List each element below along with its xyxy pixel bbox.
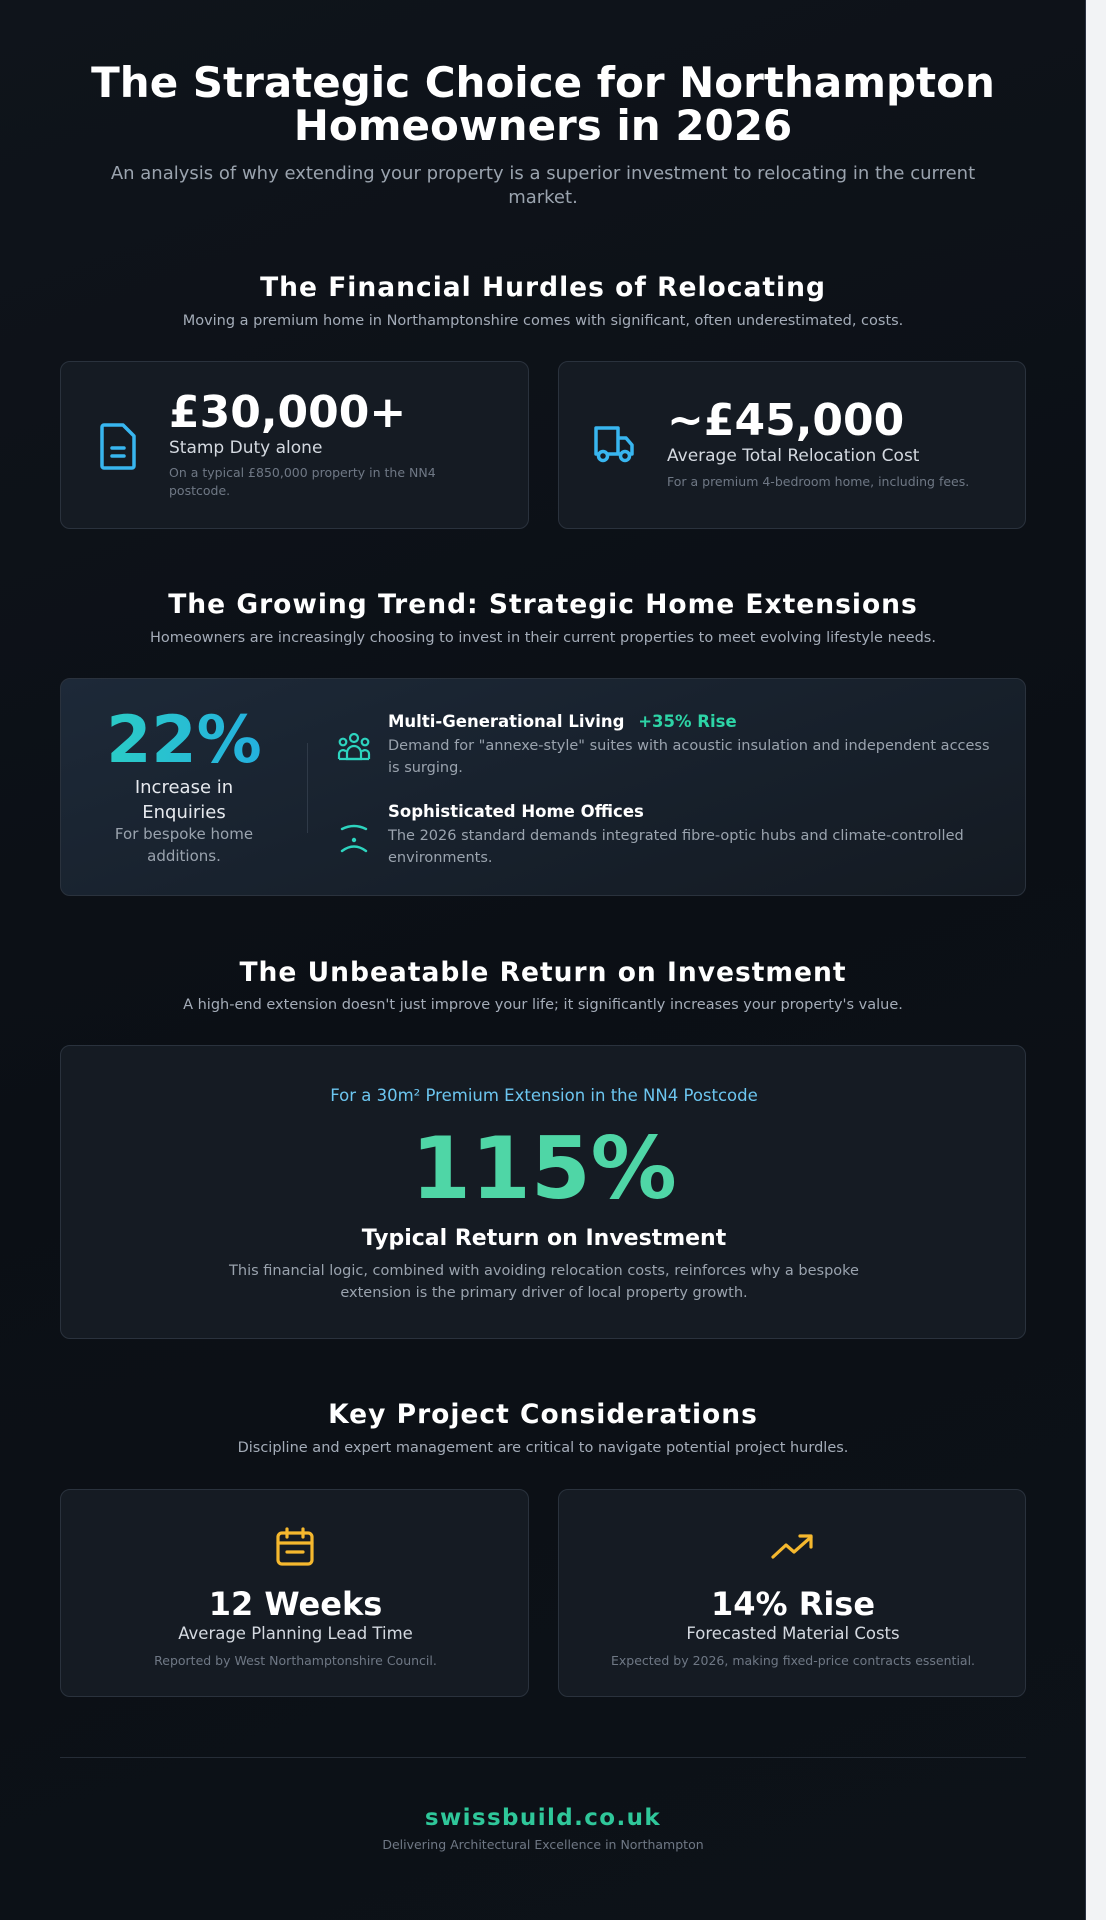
title [91,58,995,150]
label: relocation: Average Total Relocation Cost [667,446,919,466]
card: relocation cost [558,361,1026,529]
footer: tagline: Delivering Architectural Excellence in Northampton [382,1837,704,1852]
subheading: considerations: Discipline and expert management are critical to navigate potential project hurdles. [238,1440,848,1456]
label: materials: Forecasted Material Costs [686,1624,900,1643]
heading: roi: The Unbeatable Return on Investment [239,957,847,988]
stat: 14% rise: 14% Rise [711,1585,875,1623]
subtitle: An analysis of why extending your property is a superior investment to relocating in the current market. [111,163,975,208]
label: enquiries: Enquiries [142,802,226,823]
subheading: growing trend: Homeowners are increasingly choosing to invest in their current properties to meet evolving lifestyle needs. [150,630,936,646]
stat: 115%: 115% [411,1119,677,1219]
heading: financial hurdles: The Financial Hurdles of Relocating [260,272,826,303]
title: multi-generational: Multi-Generational Living +35% Rise [388,712,737,731]
note: materials: Expected by 2026, making fixed-price contracts essential. [611,1653,975,1668]
note: bespoke: additions. [147,847,221,865]
stat: 12 weeks: 12 Weeks [209,1585,382,1623]
subheading: financial hurdles: Moving a premium home in Northamptonshire comes with significant, often underestimated, costs. [183,313,903,329]
heading: growing trend: The Growing Trend: Strategic Home Extensions [168,589,918,620]
subheading: roi: A high-end extension doesn't just improve your life; it significantly increases your property's value. [183,997,903,1013]
note: stamp duty: On a typical £850,000 property in the NN4 postcode. [169,465,436,498]
note: bespoke [115,825,253,865]
label: enquiries: Increase in [135,777,233,798]
caption: extension: For a 30m² Premium Extension in the NN4 Postcode [330,1086,758,1105]
title: The Strategic Choice for Northampton [91,58,995,107]
icon: people [338,732,370,760]
item: multi-generational [338,712,990,776]
stat: 22%: 22% [106,703,262,778]
note: bespoke: For bespoke home [115,825,253,843]
stat: 45000: ~£45,000 [667,395,904,446]
panel: trend [60,678,1026,896]
icon: truck [594,426,634,462]
panel: roi [60,1045,1026,1339]
title: home offices: Sophisticated Home Offices [388,802,644,821]
title: Homeowners in 2026 [294,101,792,150]
desc: home offices: The 2026 standard demands integrated fibre-optic hubs and climate-controlled environments. [388,828,964,866]
label: planning: Average Planning Lead Time [178,1624,413,1643]
stat: 22% [61,703,307,778]
icon: calendar [276,1527,314,1566]
card: planning [60,1489,529,1697]
note: relocation: For a premium 4-bedroom home, including fees. [667,474,969,489]
icon: trend arrow [771,1534,813,1559]
stat: 30000: £30,000+ [169,387,406,438]
label: enquiries [135,777,233,823]
label: roi: Typical Return on Investment [362,1226,726,1251]
icon: document [100,423,136,470]
desc: multi-generational: Demand for "annexe-style" suites with acoustic insulation and independent access is surging. [388,738,990,776]
note: planning: Reported by West Northamptonshire Council. [154,1653,437,1668]
footer: brand: swissbuild.co.uk [425,1805,661,1831]
item: home offices [340,802,964,866]
body: roi: This financial logic, combined with avoiding relocation costs, reinforces why a bespoke extension is the primary driver of local property growth. [229,1263,859,1301]
card: material costs [558,1489,1026,1697]
label: stamp duty: Stamp Duty alone [169,438,322,458]
card: stamp duty [60,361,529,529]
icon: wifi [340,824,368,852]
heading: considerations: Key Project Considerations [328,1399,758,1430]
